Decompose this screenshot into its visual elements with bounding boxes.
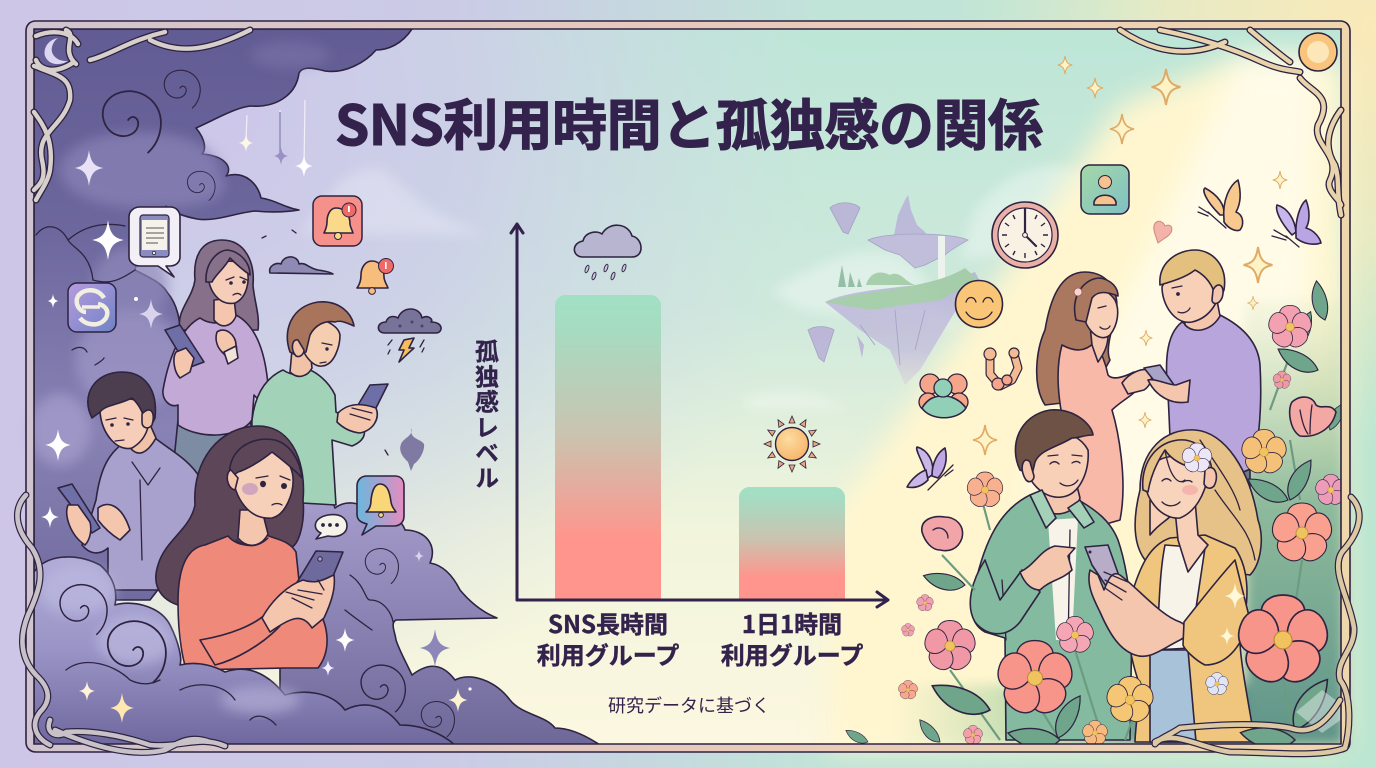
dark storm cloud, upper left <box>30 29 412 600</box>
sparkles in the sunlight <box>973 56 1287 455</box>
icon: bell app speech bubble <box>357 476 404 535</box>
bar: one hour per day <box>739 487 845 600</box>
back right cloud <box>280 488 600 745</box>
swirling cloud, lower left foreground <box>34 557 455 745</box>
icon: clock <box>992 202 1058 268</box>
person: woman in lavender sweater <box>163 240 268 480</box>
icon: community <box>919 374 968 418</box>
moon <box>44 38 68 64</box>
icon: message bubble with phone <box>129 207 180 277</box>
ornamental vine: top right with sun <box>1120 30 1341 215</box>
ornamental vine: bottom left <box>17 495 225 752</box>
person: blond woman with cardigan <box>1085 430 1261 742</box>
butterfly: orange <box>1198 180 1243 231</box>
butterfly: lilac <box>907 447 953 490</box>
bar: long SNS use <box>555 295 661 600</box>
icon: red bell app <box>313 196 362 246</box>
soft background clouds <box>300 166 1110 410</box>
garden background <box>890 300 1345 746</box>
icon: typing bubble <box>315 515 347 539</box>
floating islands <box>808 195 982 385</box>
icon: thundercloud <box>378 309 441 362</box>
person: man in lavender shirt <box>58 372 210 590</box>
person: man in purple sweater <box>1144 250 1261 510</box>
x label: long use: SNS長時間 <box>548 605 668 640</box>
icon: person app <box>1081 165 1129 214</box>
ornamental vine: bottom right <box>1155 497 1359 754</box>
butterfly: purple <box>1272 200 1321 247</box>
title: SNS利用時間と孤独感の関係 <box>335 81 1043 161</box>
icon: sync app <box>68 283 116 332</box>
axes with arrows <box>511 224 888 607</box>
icon: rain cloud <box>574 225 641 280</box>
sparkles on dark cloud <box>41 100 313 528</box>
small cloud <box>262 230 333 274</box>
x label: one hour: 利用グループ <box>721 636 863 671</box>
sun medallion <box>1299 33 1337 71</box>
person: woman in coral sweater <box>156 426 343 670</box>
x label: long use: 利用グループ <box>537 636 679 671</box>
sparkle right of cloud <box>420 629 450 667</box>
source note: 研究データに基づく <box>608 692 770 718</box>
y axis label: 孤独感レベル <box>470 339 504 491</box>
icon: orange bell <box>357 258 394 294</box>
chart: loneliness by usage group <box>470 224 888 671</box>
x label: one hour: 1日1時間 <box>742 605 842 640</box>
icon: sun <box>764 416 820 472</box>
person: man in green sweater <box>250 302 388 505</box>
ornamental vine: top left with moon <box>34 30 250 200</box>
person: woman in pink dress <box>1037 272 1152 530</box>
yellow light beam <box>830 55 1346 748</box>
icon: connection links <box>984 348 1019 390</box>
flowers and leaves <box>843 280 1352 753</box>
icon: smoke wisp <box>385 428 424 471</box>
icon: smile <box>956 280 1002 328</box>
person: man in green shirt <box>970 410 1132 740</box>
